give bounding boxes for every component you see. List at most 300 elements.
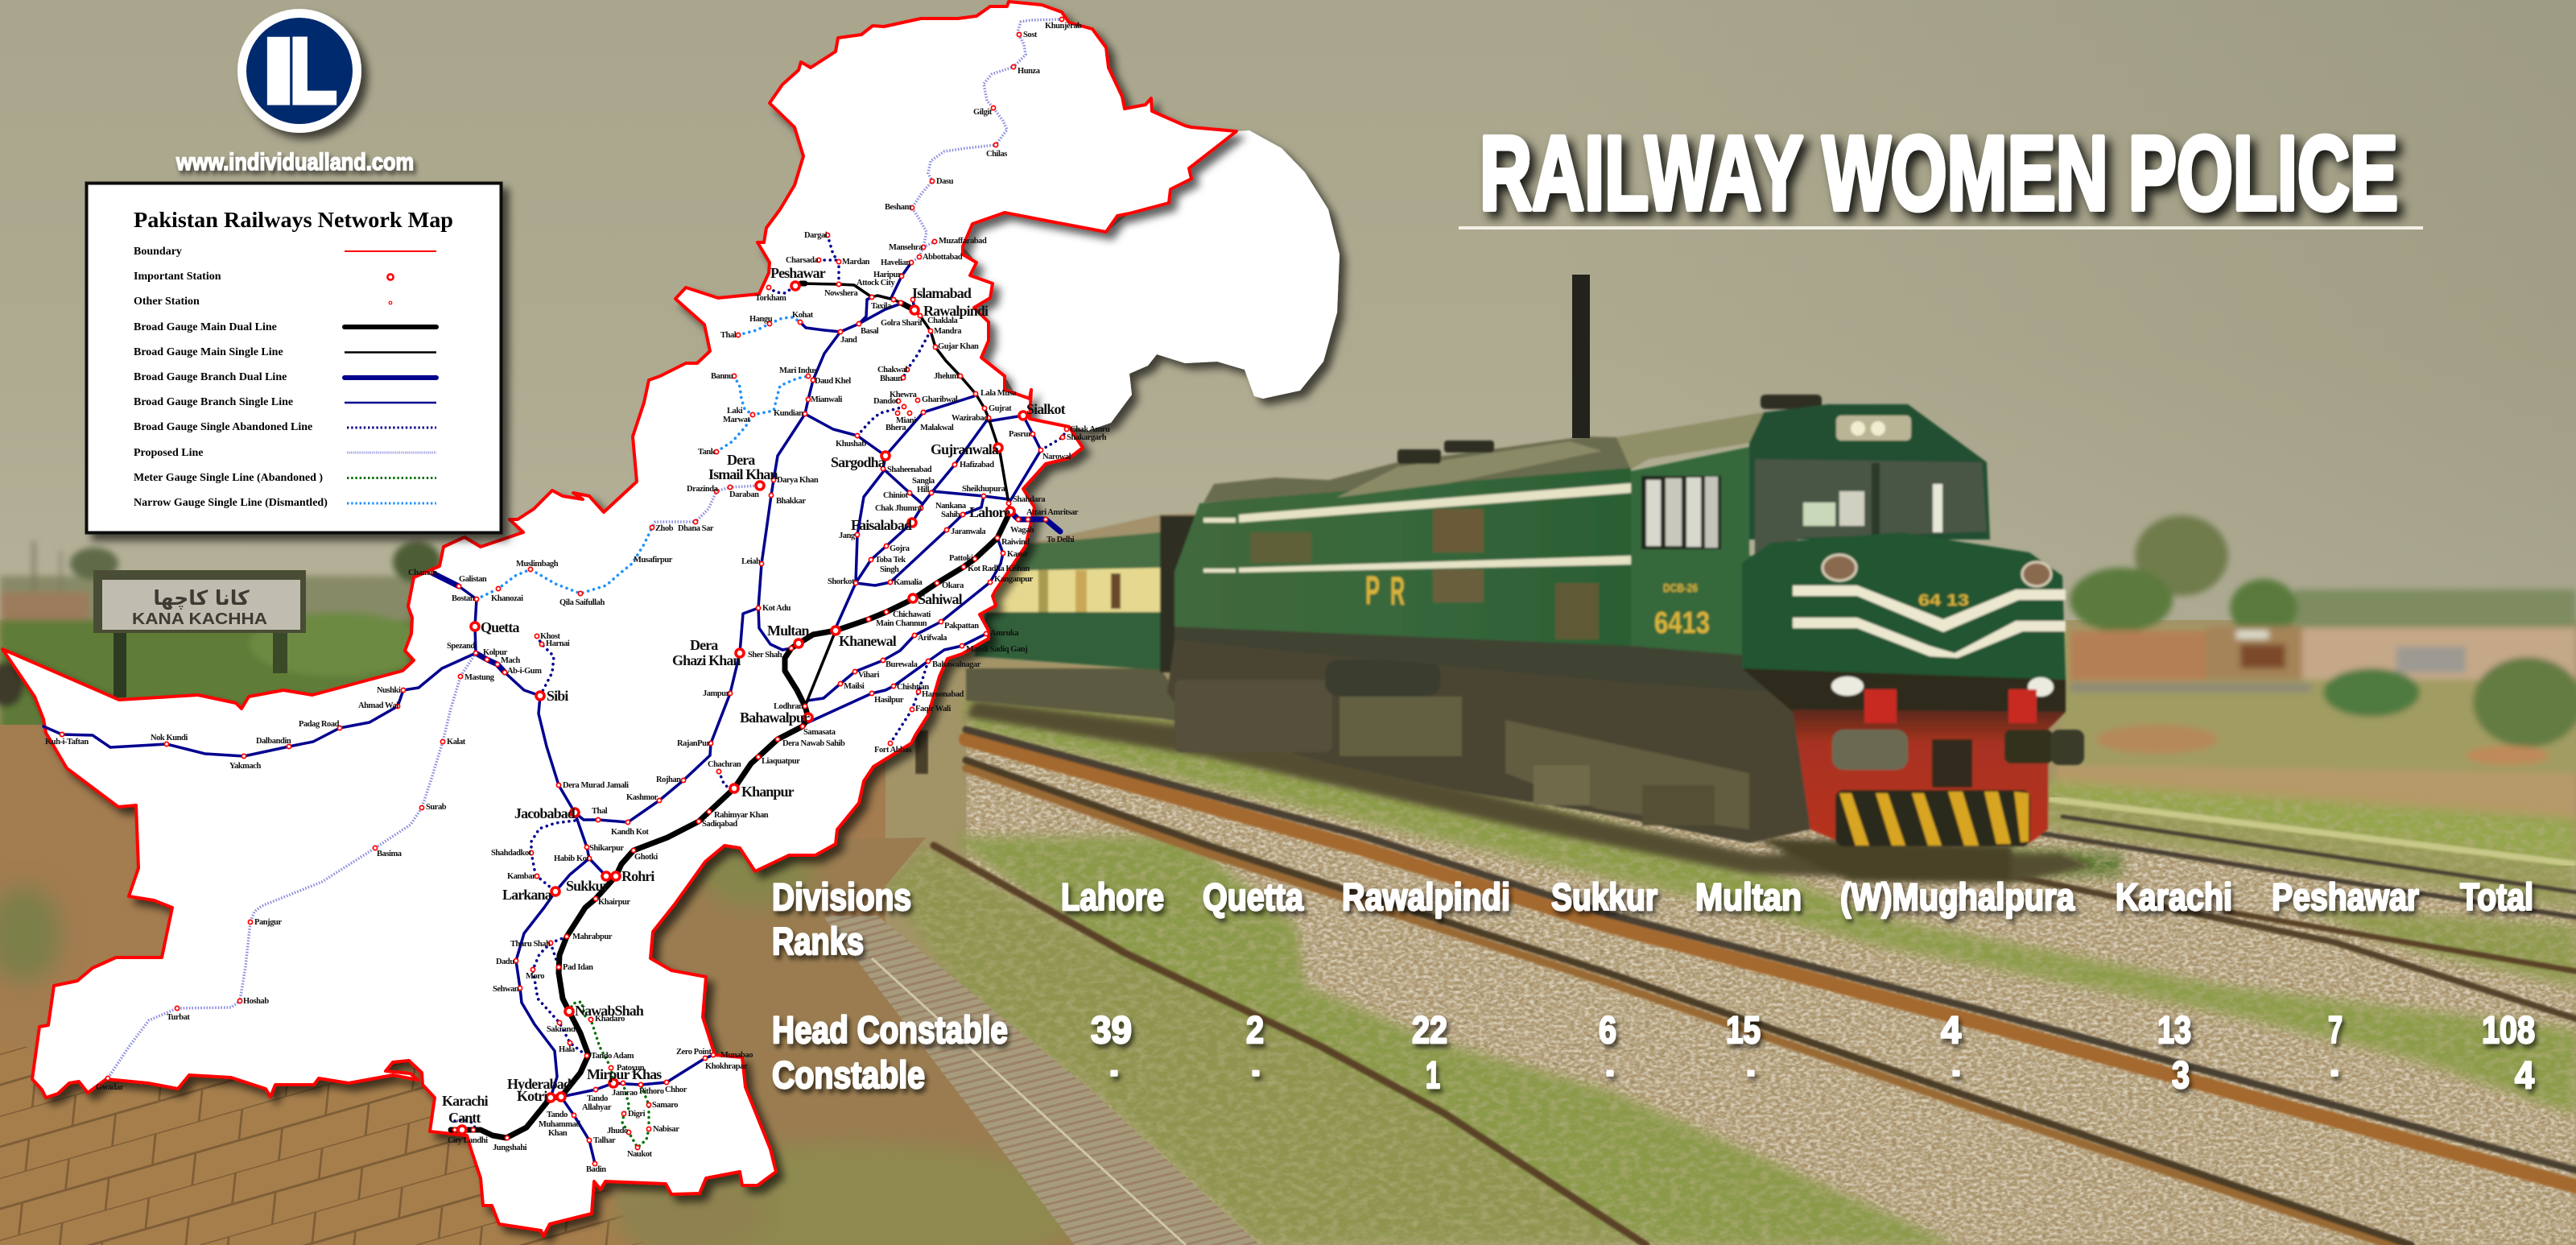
small station labels: Miani xyxy=(896,416,916,425)
major station labels: Mirpur Khas xyxy=(587,1066,662,1082)
small station labels: Mahrabpur xyxy=(572,933,613,941)
major station labels: Gujranwala xyxy=(931,441,999,457)
row: divisions header: Total xyxy=(2460,875,2533,918)
small station labels: Faqir Wali xyxy=(915,705,951,713)
row: divisions header: Divisions xyxy=(772,875,911,918)
small station labels: Tando xyxy=(587,1094,608,1103)
roof vents xyxy=(1397,395,1822,464)
small station labels: Mailsi xyxy=(844,682,865,691)
small station labels: Abbottabad xyxy=(923,253,963,262)
major station labels: Larkana xyxy=(502,887,552,903)
small station labels: Nushki xyxy=(377,686,401,695)
row: constable: - xyxy=(1110,1049,1118,1091)
small station labels: Hafizabad xyxy=(960,461,994,469)
small station labels: Panjgur xyxy=(254,918,282,927)
station name board xyxy=(93,570,306,697)
major station labels: Quetta xyxy=(481,619,519,635)
row: constable: - xyxy=(1952,1049,1960,1091)
row: head constable: 13 xyxy=(2157,1008,2191,1051)
small station labels: Khost xyxy=(540,632,561,641)
small station labels: Chichawati xyxy=(893,610,931,619)
major station labels: Ismail Khan xyxy=(708,466,778,482)
major station labels: Peshawar xyxy=(770,265,826,281)
small station labels: Singh xyxy=(880,565,899,574)
small station labels: Kohat xyxy=(792,311,814,320)
small station labels: Haripur xyxy=(873,271,902,279)
small station labels: Mastung xyxy=(464,673,495,682)
small station labels: Pithoro xyxy=(639,1087,664,1096)
far scenery left xyxy=(0,541,441,733)
small station labels: Jaranwala xyxy=(951,527,986,536)
small station labels: Daraban xyxy=(729,490,759,499)
small station labels: Leiah xyxy=(741,557,761,566)
locomotive hood side xyxy=(1174,459,1631,652)
small station labels: Gujar Khan xyxy=(938,342,979,351)
small station labels: Marwat xyxy=(723,416,750,424)
row: constable xyxy=(772,1049,2534,1096)
small station labels: Dasu xyxy=(936,177,954,186)
station name board: KANA KACHHA xyxy=(132,610,267,628)
small station labels: Burewala xyxy=(886,660,919,669)
major station labels: Sargodha xyxy=(831,454,886,470)
major station labels: Lahore xyxy=(969,504,1010,520)
frame band xyxy=(1174,627,1793,693)
small station labels: Shikarpur xyxy=(589,844,624,853)
small station labels: Bhaun xyxy=(880,374,902,383)
small station labels: Malakwal xyxy=(920,424,954,432)
small station labels: Main Channun xyxy=(876,619,927,628)
broad gauge abandoned lines xyxy=(455,235,1067,1127)
row: divisions header: Lahore xyxy=(1061,875,1164,918)
small station labels: Kuh-i-Taftan xyxy=(45,738,89,747)
row: divisions header: Rawalpindi xyxy=(1342,875,1510,918)
small station labels: Jampur xyxy=(703,689,730,698)
small station labels: Nankana xyxy=(935,502,967,511)
locomotive numbers: DCB-26 xyxy=(1663,581,1698,595)
major station labels: Bahawalpur xyxy=(740,709,810,726)
small station labels: Okara xyxy=(942,581,964,590)
logo: Individualland IL badge xyxy=(237,9,361,133)
red front xyxy=(1793,709,2066,846)
legend labels: Other Station xyxy=(134,296,200,308)
small station labels: Khunjerab xyxy=(1045,22,1082,31)
locomotive numbers: 64 13 xyxy=(1918,592,1969,610)
major station labels: NawabShah xyxy=(575,1003,644,1019)
small station labels: Kamalia xyxy=(894,578,923,587)
small station labels: Dera Nawab Sahib xyxy=(782,739,845,748)
major station labels: Ghazi Khan xyxy=(672,652,741,668)
logo: Individualland IL badge: I xyxy=(262,19,295,123)
legend labels: Important Station xyxy=(134,271,221,283)
small station labels: Laki xyxy=(727,407,743,416)
front lights xyxy=(1831,676,2054,697)
small station labels: Turbat xyxy=(167,1013,190,1022)
small station labels: Mari Indus xyxy=(779,366,817,375)
small station labels: Sehwan xyxy=(493,985,519,994)
small station labels: To Delhi xyxy=(1046,536,1075,544)
small station labels: Darya Khan xyxy=(777,476,819,485)
legend labels: Broad Gauge Main Single Line xyxy=(134,346,283,358)
row: head constable: 108 xyxy=(2482,1008,2535,1051)
small station labels: Thal xyxy=(720,331,737,340)
small station labels: Vihari xyxy=(858,671,880,680)
row: constable: 3 xyxy=(2172,1053,2190,1096)
small station labels: Kambar xyxy=(507,872,536,881)
small station labels: Golra Sharif xyxy=(881,319,923,328)
major station labels: Islamabad xyxy=(912,285,972,301)
small station labels: RajanPur xyxy=(677,739,711,748)
pilot hazard stripes xyxy=(1835,790,2030,846)
far scenery right xyxy=(2055,515,2576,821)
hood stripes xyxy=(1203,483,1631,573)
small station labels: Chilas xyxy=(986,150,1007,159)
locomotive numbers: 6413 xyxy=(1654,606,1710,640)
small station labels: Sost xyxy=(1023,31,1038,39)
small station labels: Hill xyxy=(917,486,930,494)
small station labels: Harnai xyxy=(546,639,570,648)
small station labels: Narowal xyxy=(1042,453,1071,461)
small station labels: Liaquatpur xyxy=(762,757,800,766)
small station labels: Ab-i-Gum xyxy=(507,667,542,676)
small station labels: Kundian xyxy=(774,409,803,418)
website address: www.individualland.com xyxy=(175,149,414,176)
row: constable: - xyxy=(1252,1049,1260,1091)
small station labels: Chak Amru xyxy=(1070,425,1110,434)
small station labels: Shahdadkot xyxy=(491,849,532,858)
row: ranks label: Ranks xyxy=(772,920,864,962)
small station labels: Besham xyxy=(885,203,912,212)
small station labels: Hangu xyxy=(749,315,773,324)
door panels xyxy=(1250,509,1599,639)
row: constable: - xyxy=(2330,1049,2339,1091)
small station labels: Zero Point xyxy=(676,1048,712,1057)
small station labels xyxy=(45,22,1110,1174)
bogies and tank xyxy=(1174,660,1749,829)
small station labels: Drazinda xyxy=(687,485,719,494)
panel: network map legend xyxy=(87,184,501,533)
small station labels: Bahawalnagar xyxy=(932,660,981,669)
major station labels: Kotri xyxy=(517,1088,547,1104)
major station labels: Karachi xyxy=(442,1093,489,1109)
small station labels: Attari Amritsar xyxy=(1026,508,1079,517)
small station labels: Tando xyxy=(547,1111,568,1119)
legend labels xyxy=(134,246,328,509)
major station labels: Khanewal xyxy=(839,633,897,649)
small station labels: Shorkot xyxy=(828,577,855,586)
minor station markers xyxy=(60,17,1069,1166)
small station labels: Jamrao xyxy=(612,1089,638,1098)
small station labels: Shaheenabad xyxy=(887,465,932,474)
small station labels: Bannu xyxy=(711,372,733,381)
small station labels: Dargai xyxy=(804,231,828,240)
heading: Railway Women Police xyxy=(1459,114,2423,232)
small station labels: Khushab xyxy=(836,440,866,449)
small station labels: Gojra xyxy=(890,544,910,553)
locomotive underframe xyxy=(1167,639,1810,843)
small station labels: Khairpur xyxy=(598,898,630,907)
small station labels: Bhakkar xyxy=(776,497,806,506)
major station labels: Rohri xyxy=(621,868,654,884)
row: head constable: Head Constable xyxy=(772,1008,1008,1051)
small station labels: Kalat xyxy=(447,738,466,747)
small station labels: Kashmor xyxy=(626,793,658,802)
meter gauge abandoned lines xyxy=(569,1002,649,1148)
logo: Individualland IL badge: L xyxy=(289,19,337,123)
small station labels: City Landhi xyxy=(448,1136,488,1145)
small station labels: Khewra xyxy=(890,391,918,399)
cab windows xyxy=(1641,476,1721,549)
small station labels: Amruka xyxy=(990,629,1019,638)
broad gauge main single lines xyxy=(795,283,1010,706)
small station labels: Chak Jhumra xyxy=(875,504,923,513)
narrow gauge dismantled lines xyxy=(477,317,808,599)
small station labels: Surab xyxy=(426,803,447,812)
small station labels: Hoshab xyxy=(243,997,269,1006)
small station labels: Daud Khel xyxy=(815,377,851,386)
small station labels: Pattoki xyxy=(949,554,973,563)
small station labels: Shahdara xyxy=(1013,495,1046,504)
row: divisions header: Multan xyxy=(1695,875,1802,918)
platform edge strip xyxy=(823,916,1260,1245)
small station labels: Nabisar xyxy=(653,1125,679,1134)
row: divisions header: (W)Mughalpura xyxy=(1840,875,2075,918)
ground base xyxy=(0,620,2576,1245)
important station markers xyxy=(458,282,1027,1134)
small station labels: Rojhan xyxy=(656,776,681,784)
major station labels: Dera xyxy=(690,637,718,653)
small station labels: Chhor xyxy=(665,1086,687,1094)
small station labels: Mianwali xyxy=(811,395,843,404)
row: constable: 4 xyxy=(2515,1053,2534,1096)
small station labels: Patoyun xyxy=(617,1064,645,1073)
left soil, platform and brick paving xyxy=(0,725,1087,1245)
small station labels: Tharu Shah xyxy=(510,940,551,949)
legend labels: Narrow Gauge Single Line (Dismantled) xyxy=(134,497,328,509)
major station labels: Sibi xyxy=(547,688,568,704)
small station labels: Kandh Kot xyxy=(611,828,649,837)
small station labels: Digri xyxy=(628,1110,646,1119)
small station labels: Mach xyxy=(501,656,520,665)
small station labels: Thal xyxy=(592,807,608,816)
small station labels: Toba Tek xyxy=(875,556,906,565)
major station labels: Hyderabad xyxy=(507,1076,572,1092)
legend labels: Broad Gauge Branch Single Line xyxy=(134,396,293,408)
small station labels: Galistan xyxy=(459,575,487,584)
small station labels: Gujrat xyxy=(989,404,1012,413)
cab side xyxy=(1631,447,1807,660)
small station labels: Khokhrapar xyxy=(705,1062,748,1071)
small station labels: Muzaffarabad xyxy=(939,237,987,246)
small station labels: Ghotki xyxy=(634,853,658,862)
major station labels: Khanpur xyxy=(741,784,795,800)
small station labels: Sadiqabad xyxy=(702,820,737,829)
locomotive numbers: R xyxy=(1390,569,1405,614)
major station labels: Dera xyxy=(727,452,755,468)
front couplers xyxy=(1832,689,2084,788)
small station labels: Hasilpur xyxy=(874,696,904,705)
small station labels: Gharibwal xyxy=(922,395,958,404)
major station labels: Sahiwal xyxy=(918,591,963,607)
major station labels: Jacobabad xyxy=(514,805,576,821)
small station labels: Zhob xyxy=(655,524,674,533)
row: head constable: 39 xyxy=(1091,1008,1132,1051)
rail ballast beds xyxy=(966,709,2576,1245)
major station labels: Sialkot xyxy=(1026,401,1066,417)
row: head constable: 4 xyxy=(1941,1008,1961,1051)
small station labels: Dhana Sar xyxy=(678,524,714,533)
marker lights xyxy=(1823,555,2051,586)
legend labels: Proposed Line xyxy=(134,447,203,459)
small station labels: Jang xyxy=(839,532,856,540)
small station labels: Havelian xyxy=(881,259,910,267)
small station labels: Sangla xyxy=(912,477,935,486)
small station labels: Charsada xyxy=(786,256,819,265)
small station labels: Khadaro xyxy=(595,1015,625,1024)
major station labels: Faisalabad xyxy=(851,517,912,533)
small station labels: Jungshahi xyxy=(493,1144,527,1152)
small station labels: Fort Abbas xyxy=(874,746,911,755)
row: head constable xyxy=(772,1008,2535,1051)
small station labels: Nowshera xyxy=(824,289,859,298)
small station labels: Chishtian xyxy=(897,683,929,692)
windshield xyxy=(1755,459,1987,556)
row: head constable: 15 xyxy=(1726,1008,1761,1051)
legend labels: Broad Gauge Single Abandoned Line xyxy=(134,421,312,433)
small station labels: Talhar xyxy=(593,1136,616,1145)
small station labels: Kasur xyxy=(1007,550,1029,559)
small station labels: Raiwind xyxy=(1001,538,1030,547)
small station labels: Bhera xyxy=(886,424,906,432)
broad gauge main dual line xyxy=(451,283,1010,1138)
small station labels: Mandi Sadiq Ganj xyxy=(966,645,1027,654)
small station labels: Kolpur xyxy=(483,648,508,657)
small station labels: Basima xyxy=(377,850,402,858)
small station labels: Mansehra xyxy=(889,243,923,252)
row: divisions header: Peshawar xyxy=(2272,875,2419,918)
small station labels: Chaklala xyxy=(927,316,958,325)
legend labels: Broad Gauge Branch Dual Line xyxy=(134,371,287,383)
small station labels: Chaman xyxy=(408,569,437,577)
locomotive numbers xyxy=(1365,568,1969,640)
small station labels: Kot Radha Kishan xyxy=(968,565,1030,573)
nose xyxy=(1742,532,2066,680)
row: constable: Constable xyxy=(772,1053,925,1096)
title underline xyxy=(1459,226,2423,230)
small station labels: Khanozai xyxy=(491,594,523,603)
major station labels: Multan xyxy=(767,622,809,639)
passenger coach xyxy=(966,513,1203,725)
legend labels: Meter Gauge Single Line (Abandoned ) xyxy=(134,472,323,484)
small station labels: Lala Musa xyxy=(980,389,1017,398)
row: head constable: 2 xyxy=(1246,1008,1264,1051)
small station labels: Gilgit xyxy=(973,108,993,117)
small station labels: Samasata xyxy=(803,728,836,737)
row: head constable: 22 xyxy=(1412,1008,1447,1051)
row: constable: - xyxy=(1606,1049,1614,1091)
small station labels: Kot Adu xyxy=(762,604,791,613)
sky xyxy=(0,0,2576,636)
small station labels: Dandot xyxy=(873,397,899,406)
small station labels: Dalbandin xyxy=(256,737,291,746)
train xyxy=(966,395,2084,846)
chevrons xyxy=(1793,585,2066,658)
proposed rail lines xyxy=(108,19,1062,1078)
small station labels: Moro xyxy=(526,972,544,981)
small station labels: Chiniot xyxy=(883,491,909,500)
small station labels: Jhudo xyxy=(607,1127,628,1135)
small station labels: Sahib xyxy=(941,511,960,519)
small station labels: Naukot xyxy=(627,1150,653,1159)
Pakistan outline with red boundary xyxy=(2,2,1236,1236)
map of Pakistan railways xyxy=(2,2,1340,1236)
small station labels: Muhammad xyxy=(539,1120,580,1129)
small station labels: Ahmad Wal xyxy=(358,701,398,710)
row: divisions header xyxy=(772,875,2533,918)
cab roof and nose top xyxy=(1616,412,1764,469)
small station labels: Sher Shah xyxy=(748,651,782,660)
small station labels: Sakrand xyxy=(547,1025,576,1034)
small station labels: Hunza xyxy=(1018,67,1041,76)
small station labels: Pakpattan xyxy=(944,622,979,631)
major station labels: Rawalpindi xyxy=(923,303,989,319)
small station labels: Yakmach xyxy=(229,762,261,771)
train shadow xyxy=(966,701,2093,883)
headlight box xyxy=(1836,416,1911,441)
legend labels: Boundary xyxy=(134,246,182,258)
small station labels: Hala xyxy=(559,1045,576,1054)
small station labels: Shakargarh xyxy=(1067,433,1107,442)
small station labels: Mardan xyxy=(842,258,870,267)
small station labels: Wazirabad xyxy=(952,414,989,423)
legend symbols xyxy=(345,251,436,503)
small station labels: Arifwala xyxy=(918,634,947,643)
small station labels: Khan xyxy=(548,1129,568,1138)
Kashmir region fill xyxy=(963,130,1340,431)
small station labels: Jhelum xyxy=(934,372,959,381)
legend labels: Broad Gauge Main Dual Line xyxy=(134,321,277,333)
grass strips xyxy=(886,694,2576,1245)
row: head constable: 6 xyxy=(1599,1008,1616,1051)
legend box xyxy=(87,184,501,533)
small station labels: Lodhran xyxy=(774,702,803,711)
row: constable: - xyxy=(1747,1049,1755,1091)
small station labels: Wagah xyxy=(1010,526,1034,535)
small station labels: Torkham xyxy=(755,294,786,303)
small station labels: Nok Kundi xyxy=(151,734,188,742)
small station labels: Badin xyxy=(586,1165,606,1174)
small station labels: Allahyar xyxy=(582,1103,612,1112)
small station labels: Tando Adam xyxy=(591,1052,634,1061)
small station labels: Mandra xyxy=(934,327,962,336)
small station labels: Rahimyar Khan xyxy=(714,811,769,820)
small station labels: Samaro xyxy=(652,1101,678,1110)
small station labels: Jand xyxy=(840,336,857,345)
row: constable: 1 xyxy=(1426,1053,1440,1096)
table: ranks by division xyxy=(772,875,2535,1096)
small station labels: Tank xyxy=(698,448,716,457)
row: divisions header: Sukkur xyxy=(1551,875,1657,918)
small station labels: Spezand xyxy=(447,642,475,651)
small station labels: Chakwal xyxy=(877,366,908,374)
roof xyxy=(1203,436,1631,503)
row: divisions header: Karachi xyxy=(2116,875,2232,918)
small station labels: Taxila xyxy=(871,302,892,311)
small station labels: Basal xyxy=(861,327,879,336)
small station labels: Haroonabad xyxy=(922,690,964,699)
small station labels: Attock City xyxy=(857,279,895,287)
small station labels: Gwadar xyxy=(96,1083,124,1092)
major station labels xyxy=(442,265,1066,1126)
